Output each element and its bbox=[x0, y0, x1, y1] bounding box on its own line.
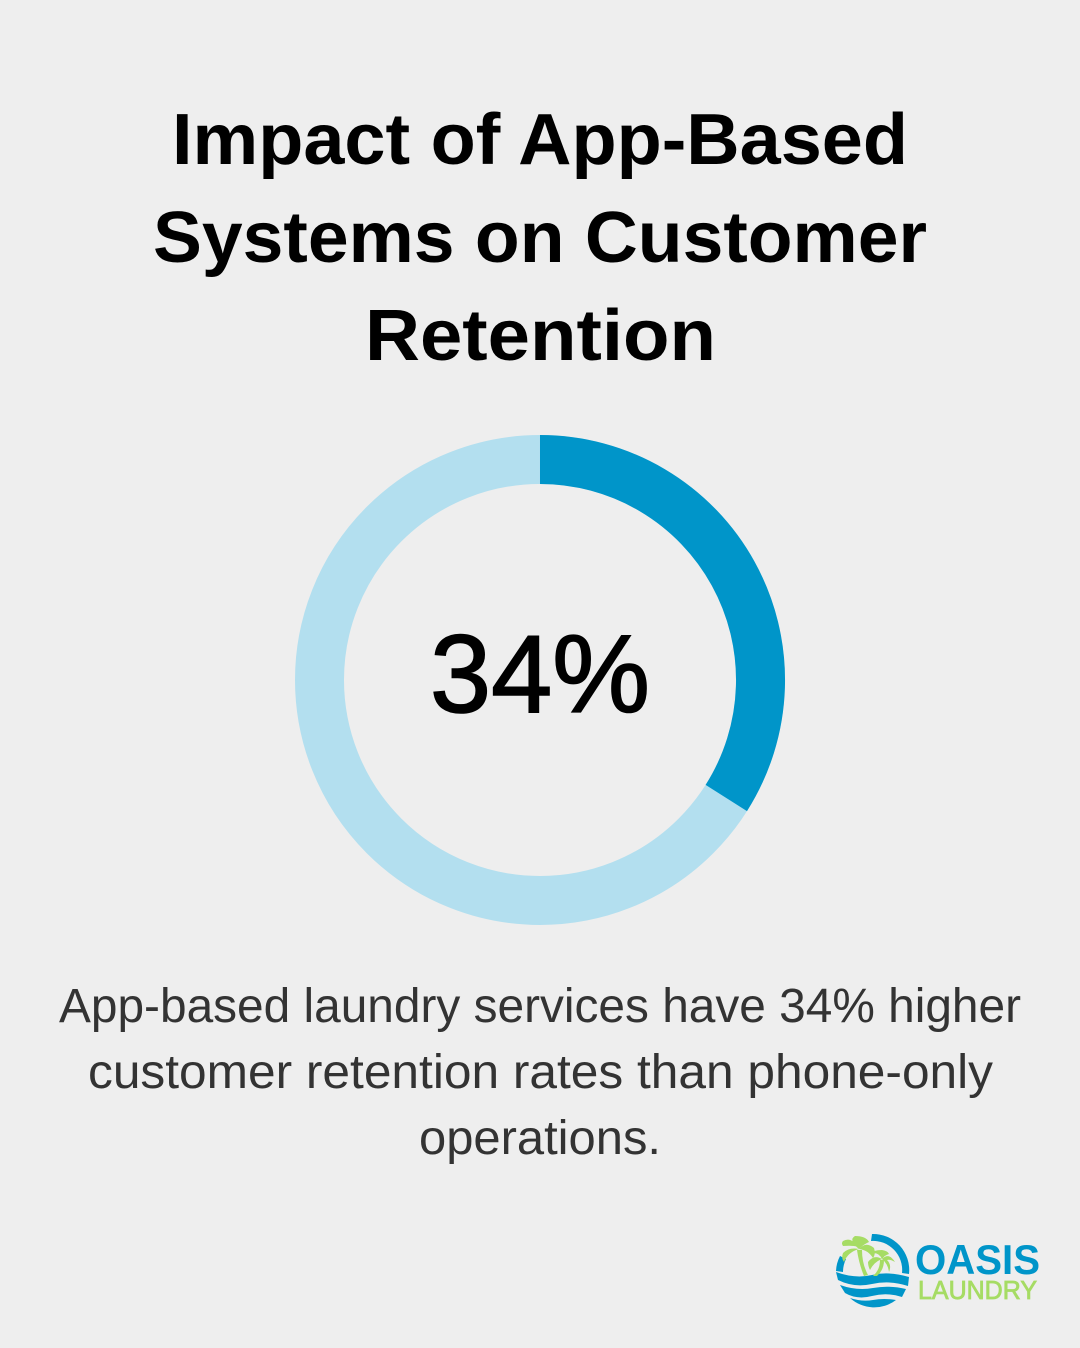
title: Retention bbox=[365, 296, 716, 376]
logo: Oasis Laundry bbox=[836, 1234, 1040, 1307]
logo wordmark: LAUNDRY: LAUNDRY bbox=[918, 1275, 1037, 1305]
description text: operations. bbox=[419, 1112, 661, 1165]
title: Systems on Customer bbox=[153, 198, 927, 278]
title: Impact of App-Based bbox=[172, 100, 908, 180]
description text: customer retention rates than phone-only bbox=[88, 1046, 993, 1099]
donut chart: 34% bbox=[320, 459, 761, 900]
logo wordmark: OASIS: OASIS bbox=[915, 1236, 1040, 1283]
description text bbox=[59, 980, 1021, 1165]
description text: App-based laundry services have 34% higher bbox=[59, 980, 1021, 1033]
icon: circle with palms and waves bbox=[836, 1234, 909, 1307]
title bbox=[153, 100, 927, 376]
percentage value: 34% bbox=[430, 613, 650, 736]
